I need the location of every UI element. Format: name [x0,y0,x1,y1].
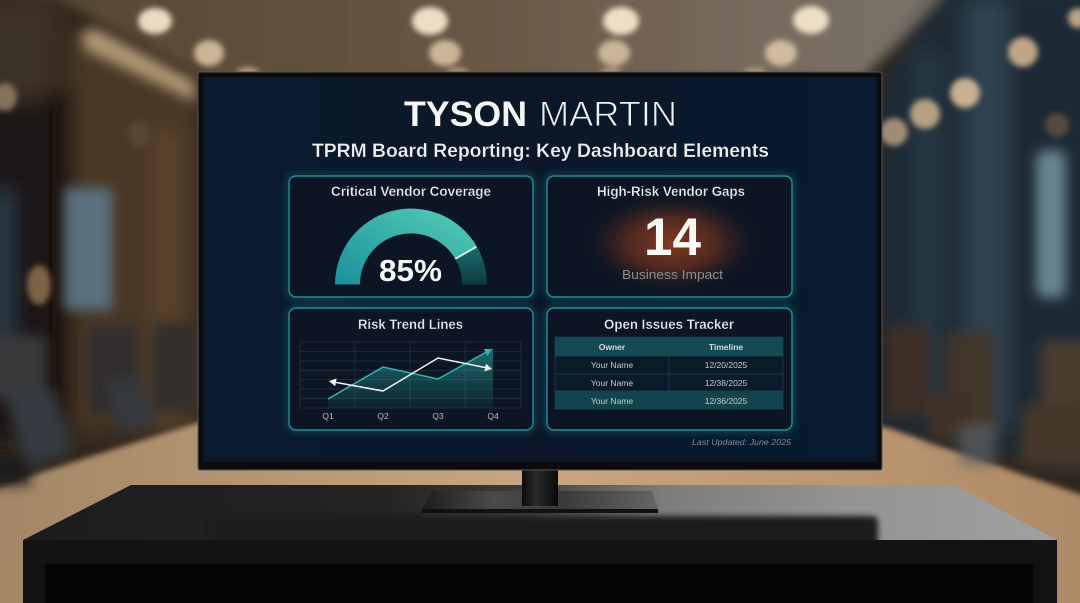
floor bottom strip [0,560,1080,603]
monitor [198,72,882,470]
desk legs [23,564,1057,603]
panel: risk trend lines [289,308,533,430]
logo: Tyson Martin [404,95,677,134]
logo: Tyson Martin: MARTIN [539,95,677,134]
card title: Risk Trend Lines [358,317,463,332]
axis labels [322,411,499,421]
desk front edge [23,540,1057,564]
screen [203,77,877,462]
axis labels: Q1 [322,411,334,421]
card title: High-Risk Vendor Gaps [597,184,745,199]
blue window glow left [64,188,112,310]
table: Your Name [591,360,633,370]
stand neck [522,470,558,506]
axis labels: Q4 [487,411,499,421]
panel: open issues tracker [547,308,792,430]
area under teal line [328,348,493,408]
heading: TPRM Board Reporting: Key Dashboard Elements [312,140,769,162]
table: 12/38/2025 [705,378,748,388]
panel: critical vendor coverage [289,176,533,297]
left wood wall [0,0,200,440]
bezel [198,72,882,470]
left chairs [0,322,198,485]
logo: Tyson Martin: TYSON [404,95,527,134]
big number: 14 [644,208,702,267]
warm glow [580,190,764,296]
card title: Critical Vendor Coverage [331,184,491,199]
table: Your Name [591,378,633,388]
wood floor [0,422,1080,603]
stand base [422,491,658,509]
gauge value: 85% [379,253,442,288]
gauge [335,209,487,284]
right blue curtain wall [880,0,1080,480]
bright window strip right [1036,150,1066,298]
desk top surface [23,485,1057,540]
panel: high-risk vendor gaps [547,176,792,297]
sub label: Business Impact [622,267,723,282]
desk [23,485,1057,603]
table: 12/36/2025 [705,396,748,406]
ceiling [0,0,950,80]
monitor stand [422,470,658,513]
axis labels: Q2 [377,411,389,421]
card title: Open Issues Tracker [604,317,735,332]
left ceiling cove light [80,28,195,102]
right chairs [885,325,1080,470]
desk surface shadow [386,512,882,540]
table: Timeline [709,342,743,352]
bokeh ceiling lights [0,6,1080,305]
last updated note: Last Updated: June 2025 [692,437,791,447]
table: 12/20/2025 [705,360,748,370]
white trend line [331,358,490,391]
table: Owner [599,342,626,352]
axis labels: Q3 [432,411,444,421]
line chart [300,342,521,408]
table: Your Name [591,396,633,406]
desk body [45,564,1033,603]
teal trend line [328,350,490,399]
table [555,337,783,409]
